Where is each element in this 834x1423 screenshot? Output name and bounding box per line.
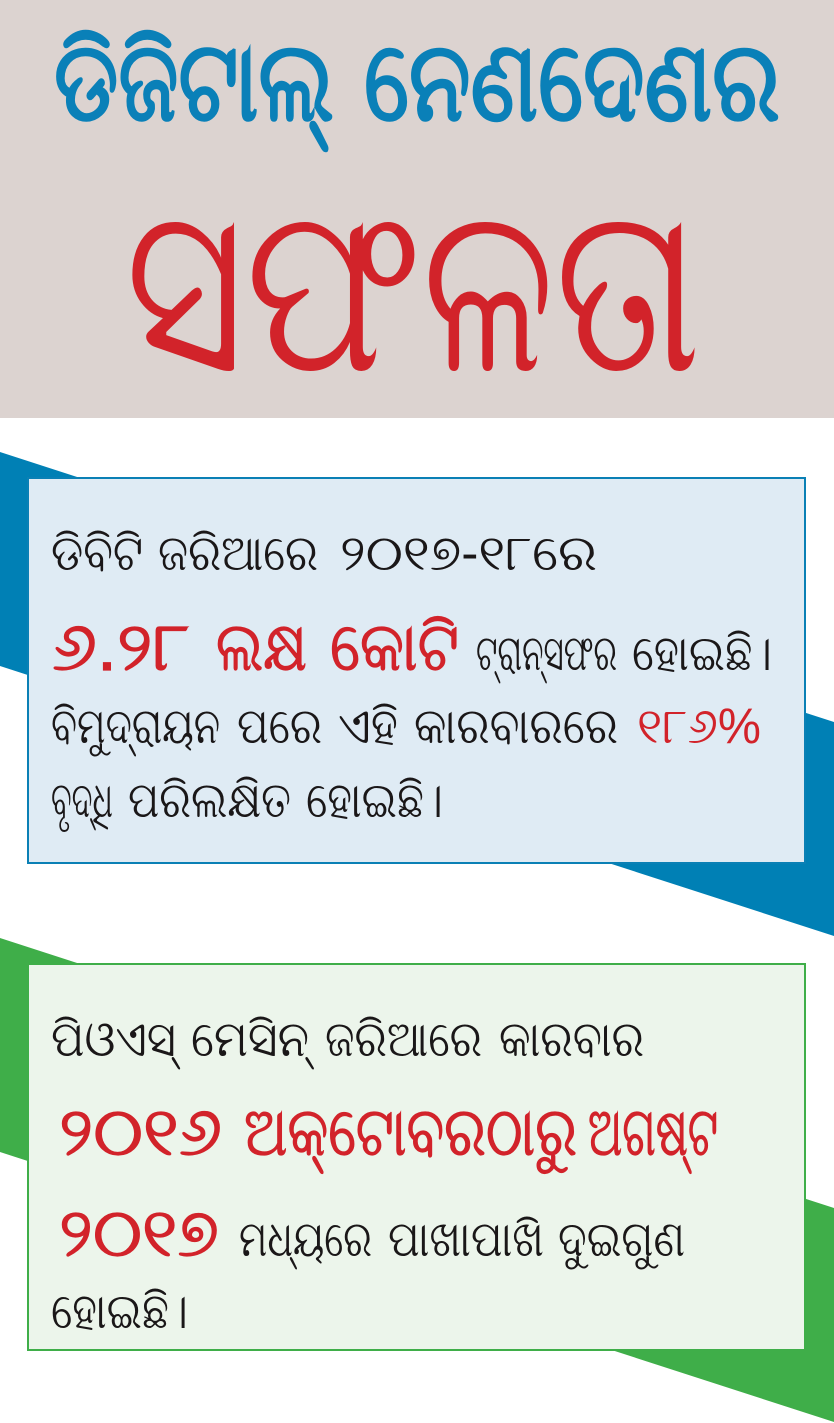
title panel <box>0 0 834 422</box>
panel: POS transactions <box>28 964 805 1350</box>
POS line 1: କାରବାର <box>499 1011 644 1067</box>
DBT line 2 highlighted amount: ଲକ୍ଷ <box>216 609 307 685</box>
DBT line 2 remainder: ହୋଇଛି। <box>632 625 772 681</box>
POS line 3 remainder <box>239 1211 685 1270</box>
DBT line 3: ପରେ <box>237 698 322 754</box>
POS line 1: ମେସିନ୍ <box>191 1011 314 1070</box>
DBT line 1: ଡିବିଟି <box>51 525 143 581</box>
POS line 2 highlighted dates <box>59 1094 718 1174</box>
DBT line 4 <box>51 772 443 832</box>
POS line 3 remainder: ମଧ୍ୟରେ <box>239 1211 372 1270</box>
DBT line 1: ୨୦୧୭-୧୮ରେ <box>340 525 597 581</box>
POS line 2 highlighted dates: ଅକ୍ଟୋବରଠାରୁ <box>244 1094 577 1174</box>
DBT line 2 highlighted amount <box>52 609 459 685</box>
panel: DBT transfers <box>28 478 805 863</box>
POS line 3 remainder: ପାଖାପାଖି <box>388 1211 544 1267</box>
DBT line 1: ଜରିଆରେ <box>158 525 318 581</box>
DBT line 4: ପରିଲକ୍ଷିତ <box>128 772 291 828</box>
DBT line 2 highlighted amount: ୬.୨୮ <box>52 609 190 685</box>
POS line 4: ହୋଇଛି। <box>51 1283 188 1339</box>
DBT line 3: ଏହି <box>338 698 398 754</box>
POS line 2 highlighted dates: ୨୦୧୬ <box>59 1094 222 1170</box>
DBT line 3 <box>51 698 618 757</box>
DBT line 1 <box>51 525 597 581</box>
green diagonal band <box>0 938 834 1422</box>
POS line 3 remainder: ଦୁଇଗୁଣ <box>558 1211 685 1270</box>
POS line 1: ଜରିଆରେ <box>325 1011 482 1067</box>
title line 1: ଡିଜିଟାଲ୍ <box>54 19 334 153</box>
DBT line 2 remainder: ଟ୍ରାନ୍ସଫର <box>476 625 617 684</box>
DBT line 4: ହୋଇଛି। <box>306 772 443 828</box>
POS line 3 highlighted year: ୨୦୧୭ <box>59 1195 219 1271</box>
POS line 1: ପିଓଏସ୍ <box>51 1011 180 1070</box>
blue diagonal band <box>0 452 834 936</box>
title line 1 <box>54 19 780 153</box>
POS line 2 highlighted dates: ଅଗଷ୍ଟ <box>588 1094 718 1174</box>
DBT line 4: ବୃଦ୍ଧି <box>51 772 113 832</box>
POS line 1 <box>51 1011 644 1070</box>
DBT growth percentage: ୧୮୬% <box>637 698 761 754</box>
DBT line 3: କାରବାରରେ <box>414 698 618 754</box>
DBT line 3: ବିମୁଦ୍ରାୟନ <box>51 698 220 757</box>
DBT line 2 highlighted amount: କୋଟି <box>330 609 459 685</box>
